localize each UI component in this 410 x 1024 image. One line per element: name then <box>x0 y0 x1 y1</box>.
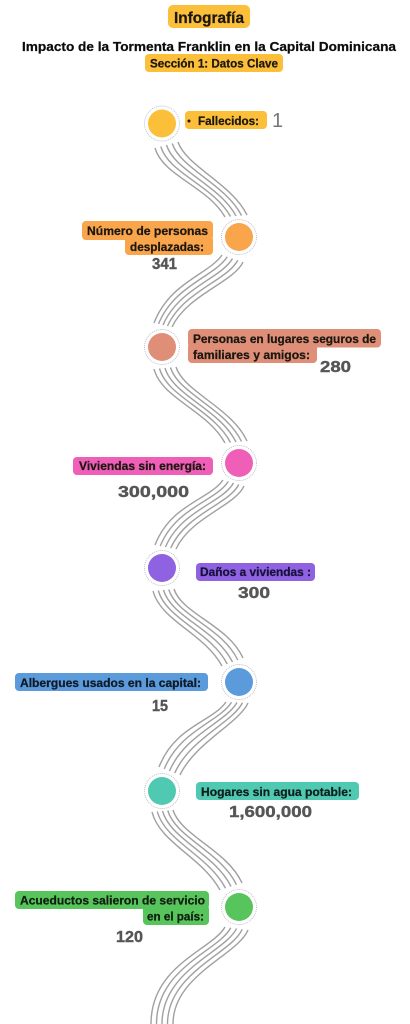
item 8: acueductos <box>15 891 209 925</box>
item 5: daños a viviendas: Daños a viviendas : <box>200 565 311 579</box>
path: wavy lines 7 to 8 <box>152 810 242 890</box>
value: 300: 300 <box>238 585 270 602</box>
node 5 <box>144 550 180 586</box>
item 4: viviendas sin energía: Viviendas sin energía: <box>79 459 206 473</box>
node 8 <box>222 890 256 924</box>
item 2: personas desplazadas <box>82 221 213 255</box>
path: wavy lines 5 to 6 <box>153 589 243 666</box>
value: 341: 341 <box>152 256 177 273</box>
value: 120: 120 <box>116 929 143 946</box>
path: wavy lines 6 to 7 <box>159 702 248 775</box>
title: Impacto de la Tormenta Franklin en la Capital Dominicana <box>22 39 397 54</box>
path: wavy lines 1 to 2 <box>155 142 247 217</box>
node 4 <box>222 446 256 480</box>
item 8: acueductos: Acueductos salieron de servicio <box>20 894 205 908</box>
value: 280: 280 <box>320 359 351 376</box>
node 2 <box>222 220 256 254</box>
heading: Infografía: Infografía <box>174 10 244 27</box>
value: 15: 15 <box>152 698 168 715</box>
path: wavy lines 2 to 3 <box>154 255 243 327</box>
item 1: Fallecidos: Fallecidos: <box>198 114 259 128</box>
value: 1: 1 <box>272 110 283 132</box>
node 3 <box>144 330 180 364</box>
path: wavy lines leaving 8 <box>151 927 248 1024</box>
item 3: lugares seguros: familiares y amigos: <box>193 348 310 362</box>
heading: Infografía <box>168 5 250 28</box>
item 3: lugares seguros: Personas en lugares seguros de <box>193 332 376 346</box>
item 2: personas desplazadas: desplazadas: <box>130 240 204 254</box>
value: 1,600,000: 1,600,000 <box>229 804 312 821</box>
item 1: Fallecidos <box>185 111 267 129</box>
value: 300,000: 300,000 <box>118 484 189 501</box>
item 3: lugares seguros <box>188 329 381 363</box>
item 2: personas desplazadas: Número de personas <box>87 224 208 238</box>
item 6: albergues: Albergues usados en la capital: <box>20 676 201 690</box>
subheading: section 1: Sección 1: Datos Clave <box>150 56 278 70</box>
item 8: acueductos: en el país: <box>147 910 204 924</box>
path: wavy lines 4 to 5 <box>155 480 244 549</box>
node 6 <box>222 664 256 700</box>
item 7: hogares sin agua: Hogares sin agua potable: <box>201 785 352 799</box>
node 7 <box>144 774 180 808</box>
node 1 <box>144 106 180 141</box>
path: wavy lines 3 to 4 <box>154 367 247 443</box>
